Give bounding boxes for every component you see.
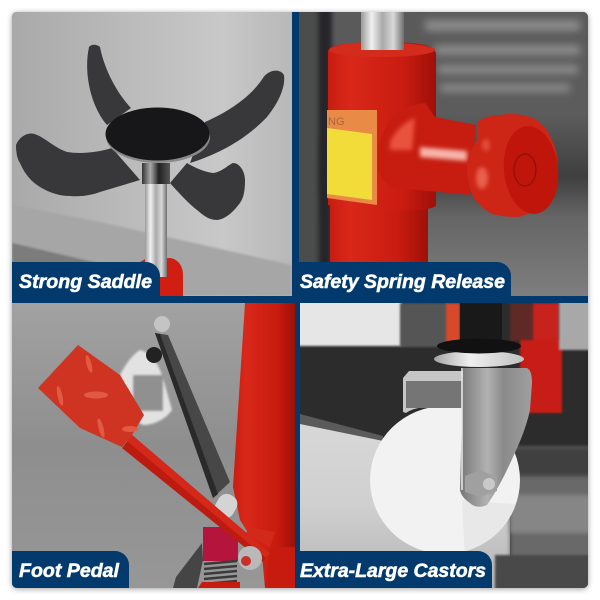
- label: safety spring release: Safety Spring Release: [300, 272, 505, 293]
- panel: extra-large castors: [290, 295, 595, 592]
- icon: swivel plates and stem: [434, 303, 524, 367]
- label: extra-large castors: [299, 551, 492, 588]
- icon: bolt: [238, 546, 262, 570]
- icon: chrome shaft: [142, 163, 170, 277]
- label: extra-large castors: Extra-Large Castors: [300, 561, 486, 582]
- icon: spring: [198, 527, 240, 588]
- icon: chrome piston: [361, 12, 404, 50]
- icon: dark frame bar: [146, 316, 230, 588]
- icon: red cylinder: [137, 258, 183, 296]
- panel: strong saddle: [12, 12, 292, 296]
- label: foot pedal: Foot Pedal: [19, 561, 120, 582]
- icon: red jack cylinder: [328, 42, 436, 262]
- icon: blurred castor: [120, 350, 172, 425]
- icon: chrome pin: [215, 494, 238, 518]
- icon: saddle arms: [16, 45, 284, 220]
- warning label: [327, 110, 377, 205]
- label: strong saddle: Strong Saddle: [19, 272, 152, 293]
- label: foot pedal: [12, 551, 129, 588]
- panel: safety spring release: [293, 6, 588, 302]
- warning label: NG: [328, 116, 344, 128]
- icon: red pedal: [38, 345, 270, 562]
- label: strong saddle: [12, 262, 160, 296]
- icon: castor fork: [403, 368, 532, 507]
- label: safety spring release: [299, 262, 511, 296]
- icon: saddle disc: [106, 108, 210, 163]
- icon: white castor wheel: [370, 408, 520, 551]
- icon: red pole: [233, 303, 295, 588]
- icon: release handle: [378, 103, 562, 217]
- panel: foot pedal: [12, 303, 295, 588]
